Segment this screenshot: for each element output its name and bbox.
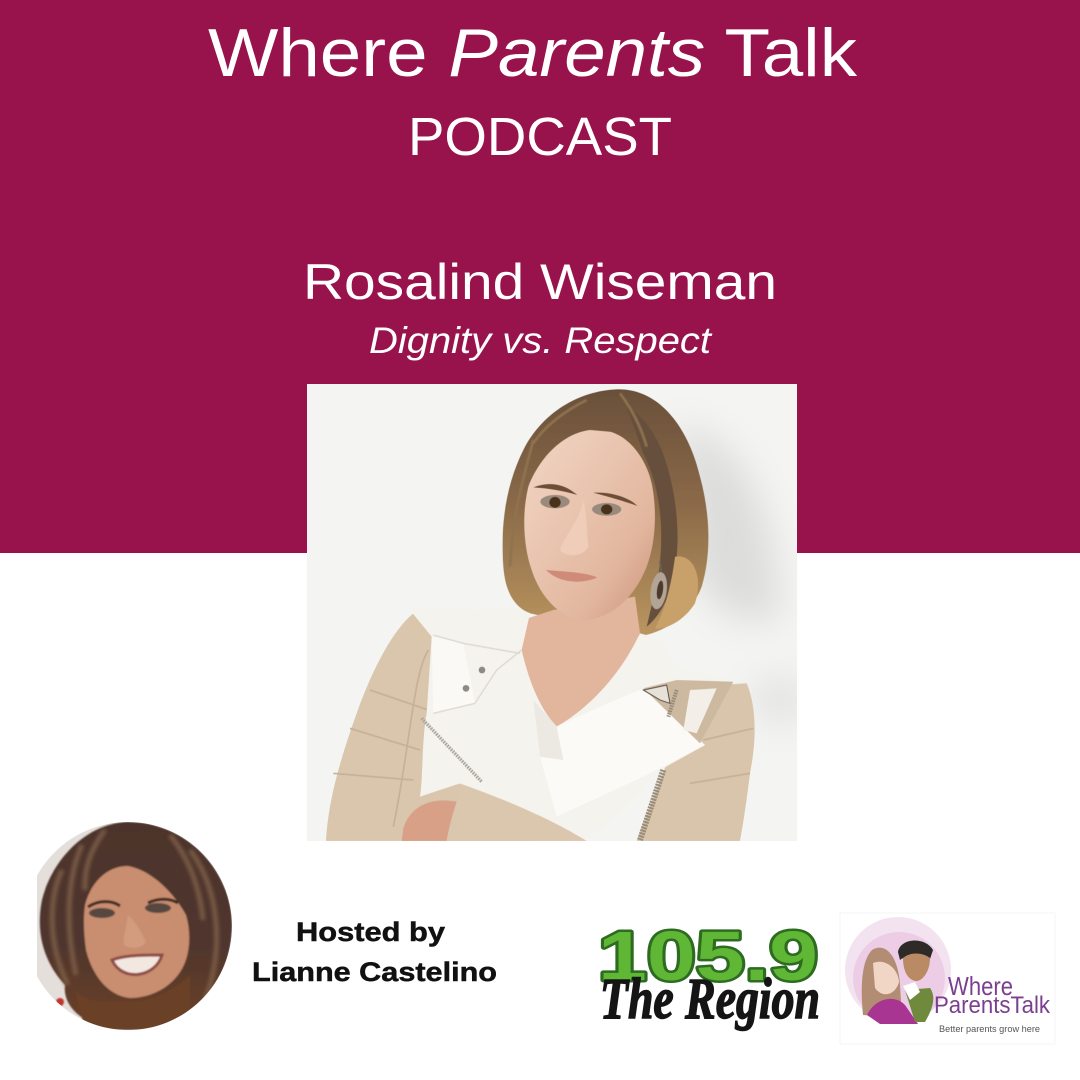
guest photo bbox=[307, 384, 810, 841]
logo: 105.9 The Region bbox=[598, 917, 820, 1031]
logo: Where Parents Talk: ParentsTalk bbox=[934, 992, 1051, 1019]
host credit: Lianne Castelino bbox=[252, 957, 497, 987]
logo: Where Parents Talk: Better parents grow here bbox=[939, 1024, 1040, 1034]
host credit: Hosted by bbox=[296, 917, 445, 947]
logo: 105.9 The Region: 105.9 bbox=[598, 917, 818, 995]
logo: 105.9 The Region: The Region bbox=[600, 966, 820, 1031]
host portrait bbox=[24, 822, 232, 1030]
host credit bbox=[252, 917, 497, 987]
guest name: Rosalind Wiseman bbox=[303, 254, 777, 310]
logo: Where Parents Talk: Where bbox=[948, 971, 1013, 1001]
title: Where Parents Talk bbox=[208, 15, 858, 91]
subtitle: podcast: PODCAST bbox=[408, 107, 672, 167]
episode topic: Dignity vs. Respect bbox=[369, 320, 713, 361]
maroon header band bbox=[0, 0, 1080, 553]
logo: Where Parents Talk bbox=[840, 913, 1055, 1044]
